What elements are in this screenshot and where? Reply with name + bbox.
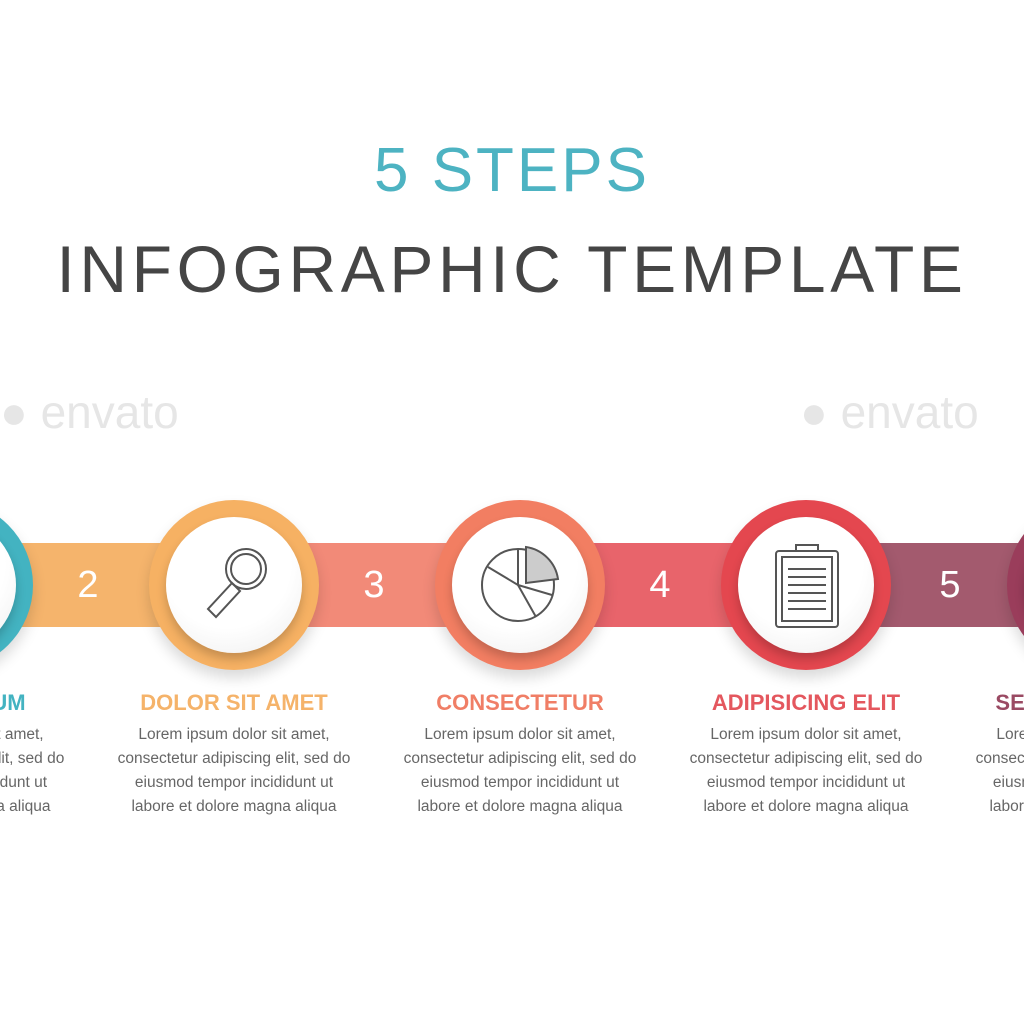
step 3 text: Lorem ipsum dolor sit amet,	[424, 726, 616, 743]
number 3: 3	[363, 564, 385, 606]
step 3 text: consectetur adipiscing elit, sed do	[404, 750, 636, 767]
band segment 4-5	[840, 543, 1024, 627]
step 3 text: eiusmod tempor incididunt ut	[421, 774, 619, 791]
watermark right: ● envato	[800, 386, 979, 438]
number 2: 2	[77, 564, 99, 606]
step 3 text	[404, 690, 636, 815]
step 2 text: eiusmod tempor incididunt ut	[135, 774, 333, 791]
step 4 text: ADIPISICING ELIT	[712, 690, 900, 715]
band segment 1-2	[0, 543, 200, 627]
step 4 text: Lorem ipsum dolor sit amet,	[710, 726, 902, 743]
step 2 text: Lorem ipsum dolor sit amet,	[138, 726, 330, 743]
step 5 text	[976, 690, 1024, 815]
number 5: 5	[939, 564, 961, 606]
step 3 text: CONSECTETUR	[436, 690, 604, 715]
step 4 text: consectetur adipiscing elit, sed do	[690, 750, 922, 767]
circle 4 with clipboard	[721, 500, 891, 670]
circle 5	[1007, 500, 1024, 670]
step 4 text: eiusmod tempor incididunt ut	[707, 774, 905, 791]
step 4 text: labore et dolore magna aliqua	[703, 798, 909, 815]
band segment 3-4	[560, 543, 760, 627]
number 4: 4	[649, 564, 671, 606]
title: 5 STEPS	[374, 136, 650, 205]
step 2 text	[118, 690, 350, 815]
circle 2 with magnifier	[149, 500, 319, 670]
circle 1	[0, 500, 33, 670]
step 2 text: DOLOR SIT AMET	[140, 690, 328, 715]
band segment 2-3	[280, 543, 480, 627]
watermark left: ● envato	[0, 386, 179, 438]
step 3 text: labore et dolore magna aliqua	[417, 798, 623, 815]
step 4 text	[690, 690, 922, 815]
circle 3 with pie chart	[435, 500, 605, 670]
step 2 text: consectetur adipiscing elit, sed do	[118, 750, 350, 767]
step 2 text: labore et dolore magna aliqua	[131, 798, 337, 815]
step 1 text	[0, 690, 64, 815]
subtitle: INFOGRAPHIC TEMPLATE	[56, 232, 968, 306]
